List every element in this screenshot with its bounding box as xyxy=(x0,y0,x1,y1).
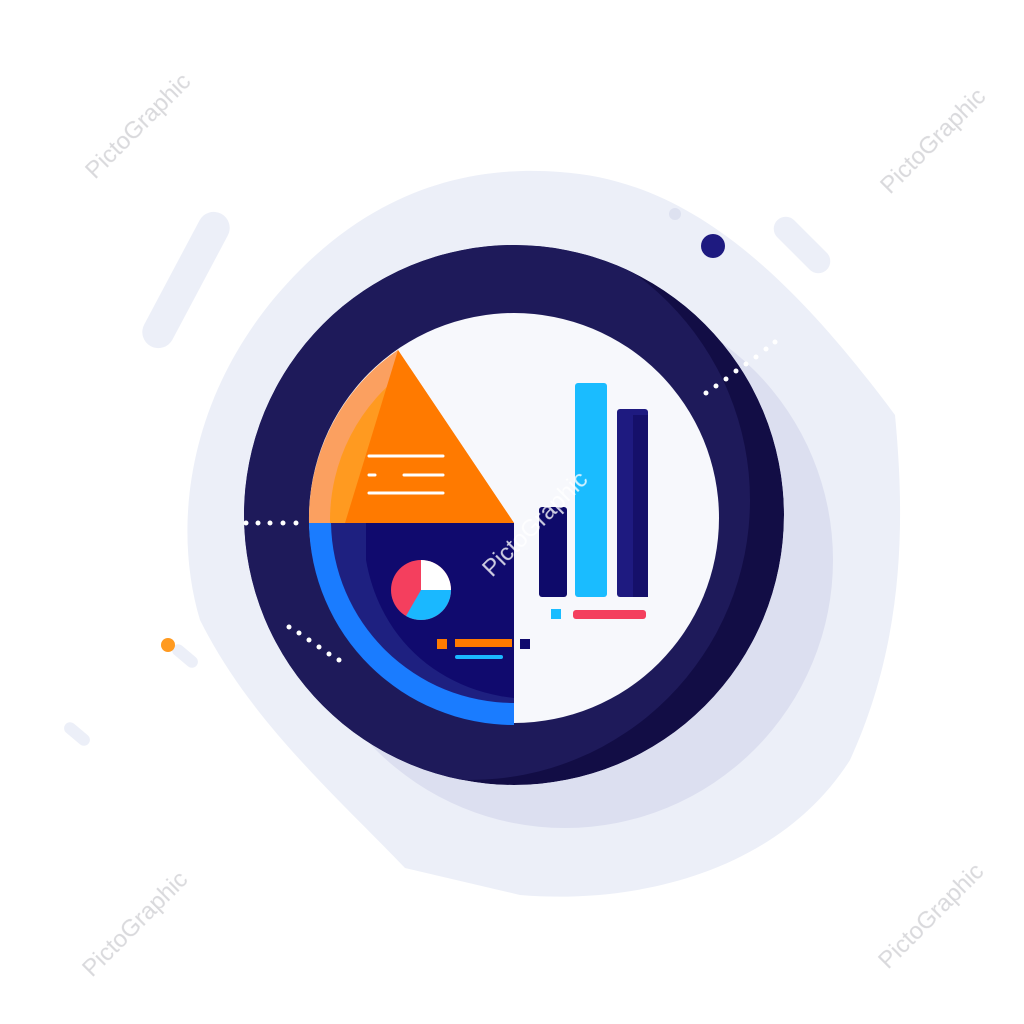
dot accents xyxy=(701,234,725,258)
inner disc xyxy=(309,313,719,723)
bar chart xyxy=(539,383,648,619)
ring shadow xyxy=(297,292,833,828)
watermarks xyxy=(77,68,991,982)
watermarks: PictoGraphic xyxy=(873,858,989,974)
decorative capsules xyxy=(62,206,835,748)
background blob xyxy=(187,171,900,897)
dark ring xyxy=(244,245,784,785)
illustration xyxy=(64,76,985,976)
panel: blue segment xyxy=(309,523,530,725)
text lines xyxy=(369,456,443,493)
watermarks: PictoGraphic xyxy=(875,83,991,199)
panel: orange segment xyxy=(309,350,514,523)
mini pie chart xyxy=(391,560,451,620)
chart legend xyxy=(551,609,561,619)
dotted lines xyxy=(244,340,778,662)
watermarks: PictoGraphic xyxy=(80,68,196,184)
legend left xyxy=(437,639,530,659)
watermarks: PictoGraphic xyxy=(477,466,593,582)
watermarks: PictoGraphic xyxy=(77,866,193,982)
